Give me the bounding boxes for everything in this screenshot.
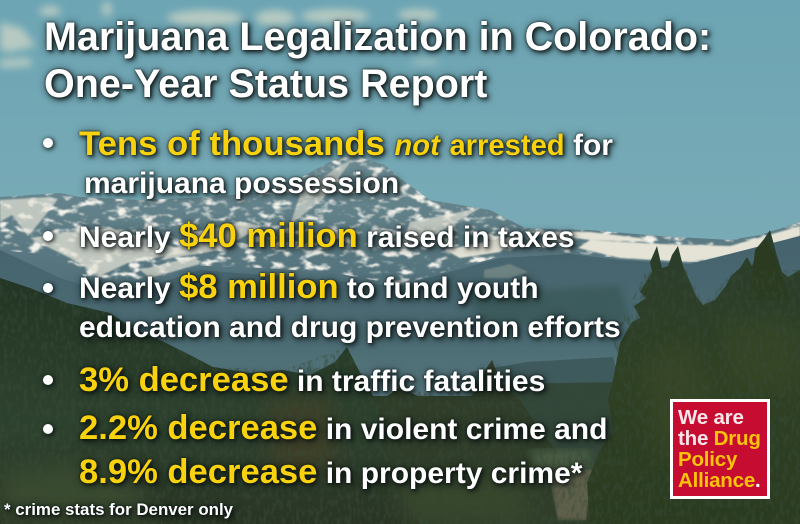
- bullet: crime decrease: 2.2% decrease in violent crime and: [79, 409, 607, 447]
- bullet: $8 million for youth education: [40, 268, 625, 350]
- logo: We are the Drug Policy Alliance: the Drug: [678, 427, 761, 450]
- title: Marijuana Legalization in Colorado:: [44, 15, 711, 59]
- title: One-Year Status Report: [44, 62, 487, 106]
- logo: We are the Drug Policy Alliance: Policy: [678, 448, 737, 471]
- mid-distance forest: [500, 382, 625, 470]
- bullet: crime decrease: 8.9% decrease in property crime*: [79, 453, 582, 491]
- bullet: tens of thousands not arrested: Tens of thousands not arrested for: [79, 125, 613, 163]
- valley clearing: [548, 465, 592, 520]
- bullet: $8 million for youth education: Nearly $8 million to fund youth: [79, 268, 539, 306]
- bullet: $40 million raised in taxes: Nearly $40 million raised in taxes: [79, 217, 575, 255]
- title: [40, 15, 714, 112]
- bullet: tens of thousands not arrested: [40, 125, 618, 205]
- logo: We are the Drug Policy Alliance: [670, 399, 770, 499]
- bullet: tens of thousands not arrested: marijuana possession: [84, 167, 399, 200]
- forest left: [0, 278, 420, 524]
- spruce trees right: [587, 230, 800, 524]
- bullet: crime decrease: [42, 409, 611, 494]
- bullet: $8 million for youth education: education and drug prevention efforts: [79, 311, 621, 344]
- bullet: traffic fatalities decrease: 3% decrease in traffic fatalities: [79, 361, 545, 399]
- logo: We are the Drug Policy Alliance: Alliance.: [678, 469, 761, 492]
- logo: We are the Drug Policy Alliance: We are: [678, 406, 744, 429]
- footnote: * crime stats for Denver only: [4, 500, 233, 519]
